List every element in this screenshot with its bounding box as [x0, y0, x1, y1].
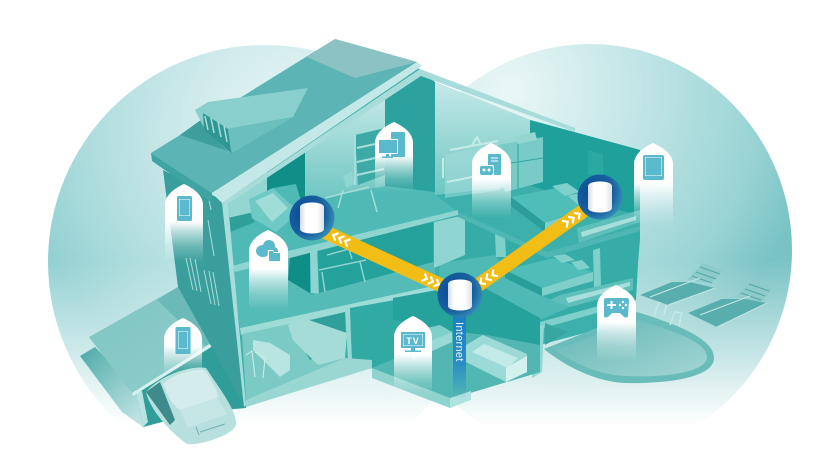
router: right	[578, 174, 622, 220]
upper right rooms	[435, 82, 640, 255]
tag: TV: TV	[406, 336, 420, 346]
sun lounger left	[640, 263, 722, 305]
left wall windows	[186, 185, 219, 306]
pool ladders	[654, 302, 682, 326]
terrace and pool deck	[470, 297, 632, 378]
tag: phone garage	[164, 318, 202, 376]
dormer	[180, 88, 308, 153]
tag: cloud and folder	[249, 230, 288, 310]
internet cable label: Internet	[453, 322, 465, 362]
media console	[396, 325, 452, 360]
router: centre	[438, 272, 482, 318]
attic room left	[228, 72, 458, 268]
internet cable label	[453, 310, 466, 398]
living room floor	[372, 287, 540, 408]
garage	[80, 287, 246, 427]
router: left	[290, 196, 334, 240]
sun lounger right	[688, 280, 773, 327]
right middle level	[438, 216, 640, 322]
lower middle left room	[233, 215, 465, 328]
tag: monitor	[375, 122, 413, 192]
tag: TV	[394, 316, 432, 396]
roof	[151, 39, 575, 205]
main house body	[163, 67, 640, 407]
lower right bedroom	[505, 248, 633, 307]
ground left room	[242, 292, 444, 407]
yellow link: left router to centre	[312, 226, 460, 294]
tag: computer and game	[472, 143, 511, 218]
pool	[544, 312, 714, 383]
sofa	[466, 335, 527, 382]
tag: tablet	[634, 143, 673, 226]
yellow link: centre to right router	[460, 199, 600, 298]
tag: game controller	[597, 285, 636, 362]
bedroom upper	[511, 183, 640, 243]
floor slabs	[222, 203, 640, 407]
attic furniture	[249, 128, 385, 232]
car	[146, 367, 236, 444]
desk and wardrobe	[443, 132, 543, 198]
tag: phone upper left	[165, 184, 203, 262]
